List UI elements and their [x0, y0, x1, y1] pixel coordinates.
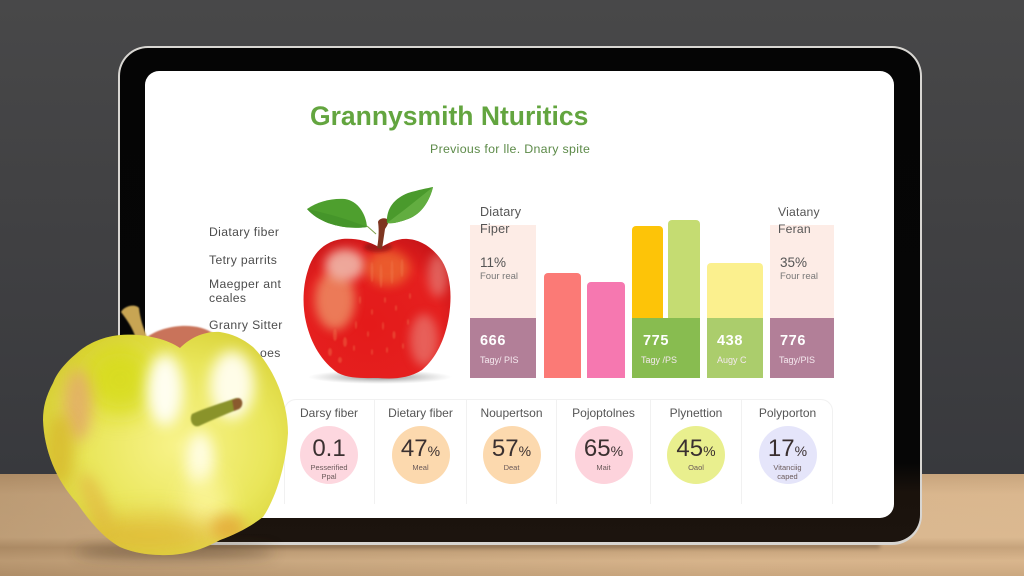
card: plynettion 45%: 45%: [676, 435, 716, 462]
card: polpoptoines 65%: Mait: [596, 463, 611, 472]
bar: right column: [770, 225, 834, 318]
tablet screen: [145, 71, 894, 518]
heading: right column: [778, 205, 820, 236]
bar: pink: [587, 282, 624, 378]
apple stem top: [121, 306, 148, 339]
left nutrient labels: [209, 225, 283, 360]
nutrient card strip: [284, 399, 833, 504]
bar: coral: [544, 273, 581, 378]
stem: [377, 218, 388, 249]
card: dietary fiber 47%: Meal: [412, 463, 429, 472]
bar: yellow-green base: [707, 318, 763, 378]
card: noupertson 57%: 57%: [492, 435, 531, 462]
bar: right purple base: [770, 318, 834, 378]
label: tetry parrits: Tetry parrits: [209, 253, 277, 267]
card: darsy fiber 0.1: 0.1: [312, 435, 346, 462]
subtitle: Previous for lle. Dnary spite: [430, 142, 590, 156]
left leaf: [307, 199, 367, 228]
apple body: [304, 238, 450, 378]
card: polpoptoines 65%: 65%: [584, 435, 623, 462]
green apple in the foreground: [43, 304, 288, 566]
card dividers: [374, 400, 375, 504]
caption: tagy green: Tagy /PS: [641, 355, 677, 365]
card: polyporton 17%: caped: [777, 472, 798, 481]
label: maegper ant: [209, 277, 281, 305]
bar: amber: [632, 226, 663, 318]
card: plynettion 45%: [667, 406, 725, 484]
card: plynettion 45%: Oaol: [688, 463, 704, 472]
caption: left: Four real: [480, 271, 518, 282]
card: polpoptoines 65%: [572, 406, 635, 484]
heading: right column: Feran: [778, 222, 811, 236]
right leaf: [387, 187, 433, 223]
bar: light green: [668, 220, 700, 318]
bar chart: [470, 205, 834, 378]
apple body: [43, 332, 288, 556]
card: polyporton 17%: Vitanciig: [773, 463, 802, 472]
card: darsy fiber 0.1: [300, 406, 358, 484]
card: polpoptoines 65%: Pojoptolnes: [572, 406, 635, 420]
heading: left column: Fiper: [480, 222, 510, 236]
back lobe blush: [146, 326, 214, 356]
caption: aug c: Augy C: [717, 355, 747, 365]
card: noupertson 57%: Noupertson: [480, 406, 543, 420]
card: plynettion 45%: Plynettion: [670, 406, 722, 420]
card: dietary fiber 47%: 47%: [401, 435, 440, 462]
card: noupertson 57%: Deat: [504, 463, 519, 472]
card: polyporton 17%: 17%: [768, 435, 807, 462]
apple shadow: [308, 370, 452, 384]
card: polyporton 17%: Polyporton: [759, 406, 816, 420]
card: noupertson 57%: [480, 406, 543, 484]
bar: green base: [632, 318, 700, 378]
bar: pale yellow: [707, 263, 763, 318]
value: 666: 666: [480, 333, 506, 349]
leaf twig: [367, 226, 376, 234]
heading: left column: [480, 205, 521, 236]
bar: left dietary fiber column: [470, 225, 536, 318]
label: partly hidden: oes: [260, 346, 281, 360]
value: 35%: 35%: [780, 255, 807, 270]
tablet frame: [118, 46, 922, 545]
card: darsy fiber 0.1: Pesserified: [310, 463, 348, 472]
caption: tagy left: Tagy/ PIS: [480, 355, 519, 365]
label: granry sitter: Granry Sitter: [209, 318, 283, 332]
card: darsy fiber 0.1: Darsy fiber: [300, 406, 358, 420]
card: dietary fiber 47%: Dietary fiber: [388, 406, 453, 420]
label: dietary fiber: Diatary fiber: [209, 225, 279, 239]
table shadow: [75, 546, 275, 558]
label: maegper ant: ceales: [209, 291, 246, 305]
apple stem front: [191, 398, 242, 426]
card: darsy fiber 0.1: Ppal: [321, 472, 336, 481]
value: 775: 775: [643, 333, 669, 349]
heading: left column: Diatary: [480, 205, 521, 219]
value: 776: 776: [780, 333, 806, 349]
label: maegper ant: Maegper ant: [209, 277, 281, 291]
bar: left purple base: [470, 318, 536, 378]
card: dietary fiber 47%: [388, 406, 453, 484]
value: 438: 438: [717, 333, 743, 349]
heading: right column: Viatany: [778, 205, 820, 219]
red apple illustration: [304, 187, 450, 384]
value: 11%: 11%: [480, 255, 506, 270]
caption: tagy right: Tagy/PIS: [779, 355, 815, 365]
caption: right: Four real: [780, 271, 818, 282]
card: polyporton 17%: [759, 406, 817, 484]
title: Grannysmith Nturitics: [310, 101, 588, 131]
